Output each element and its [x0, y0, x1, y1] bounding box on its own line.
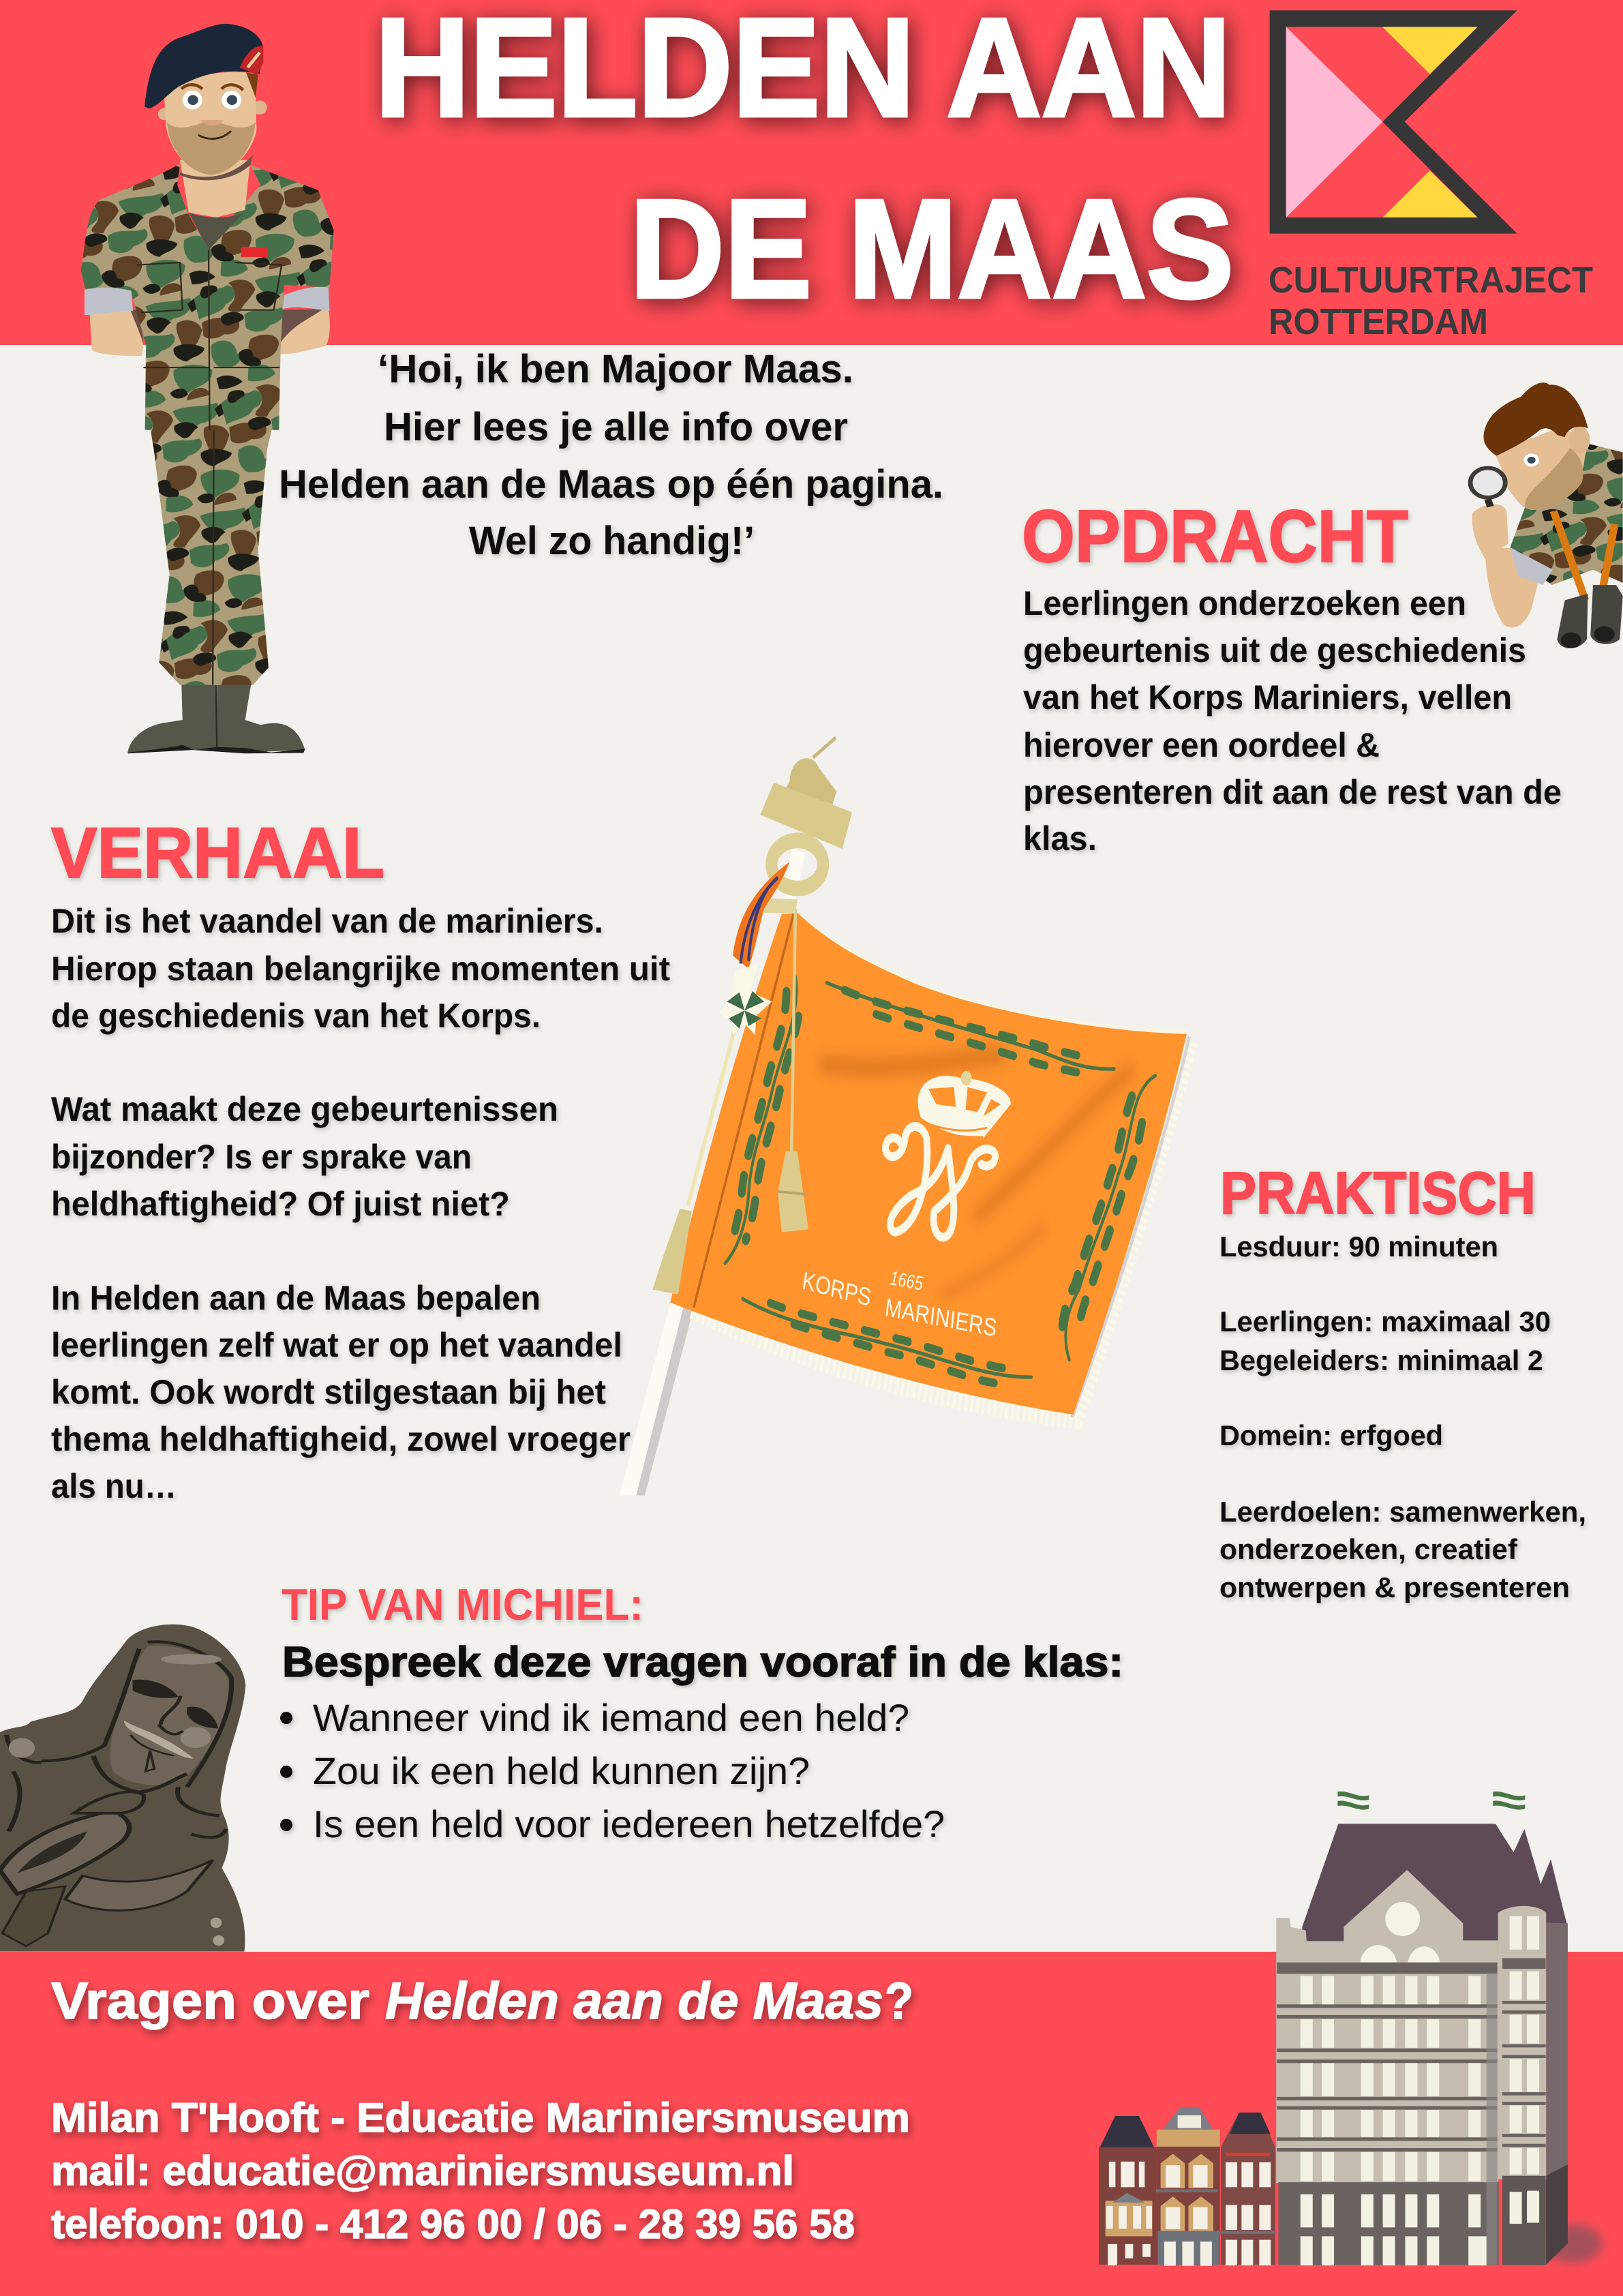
- boots: [127, 682, 305, 753]
- text: Verhaal body: Hierop staan belangrijke momenten uit: [51, 950, 670, 988]
- heading: Verhaal: VERHAAL: [51, 813, 384, 893]
- title: [375, 0, 1234, 327]
- neck: [180, 160, 250, 217]
- horizontal bands: [1277, 1958, 1546, 2151]
- text: Opdracht body: klas.: [1023, 819, 1097, 858]
- trousers: [150, 427, 272, 685]
- quote from Majoor Maas: ‘Hoi, ik ben Majoor Maas.: [378, 347, 853, 391]
- flag inscription: KORPS: [800, 1267, 873, 1312]
- name badge: [241, 247, 268, 257]
- heading: Tip van Michiel: TIP VAN MICHIEL:: [282, 1580, 643, 1629]
- tower: [1498, 1906, 1546, 2179]
- jacket seam: [209, 250, 214, 685]
- forearms and hands: [90, 309, 330, 356]
- text: Bespreek deze vragen: Bespreek deze vragen vooraf in de klas:: [282, 1639, 1123, 1686]
- ribbon: [733, 862, 789, 969]
- tower lower level: [1502, 2176, 1546, 2265]
- cravat knot: [74, 1792, 144, 1813]
- text: Verhaal body: Dit is het vaandel van de mariniers.: [51, 902, 603, 940]
- text: Verhaal body: thema heldhaftigheid, zowel vroeger: [51, 1420, 631, 1458]
- arm: [1485, 548, 1539, 627]
- hand: [2, 1886, 65, 1946]
- row of small houses: [1099, 2108, 1276, 2266]
- question 1: Wanneer vind ik iemand een held?: [313, 1696, 909, 1739]
- text: Verhaal body: de geschiedenis van het Korps.: [51, 997, 541, 1035]
- footer: contact details: Milan T'Hooft - Educatie Mariniersmuseum: [51, 2095, 910, 2141]
- royal crown: [918, 1071, 1011, 1138]
- flag folds: [825, 1055, 1130, 1295]
- cheek highlights: [9, 1654, 222, 1758]
- text: Praktisch details: ontwerpen & presenteren: [1219, 1571, 1570, 1603]
- buttons: [211, 1918, 224, 1946]
- text: Opdracht body: presenteren dit aan de rest van de: [1023, 773, 1562, 811]
- ear: [1569, 426, 1590, 454]
- wreath: top: [827, 983, 1114, 1074]
- flagpole: [620, 849, 805, 1496]
- cravat: [0, 1811, 130, 1894]
- list: discussion questions: [280, 1696, 945, 1845]
- statue body: [0, 1625, 245, 1952]
- text: Opdracht body: hierover een oordeel &: [1023, 726, 1380, 764]
- question 3: Is een held voor iedereen hetzelfde?: [313, 1802, 945, 1845]
- corner shadow: [1487, 1973, 1498, 2265]
- logo text: ROTTERDAM: [1269, 301, 1488, 342]
- moustache: [124, 1721, 194, 1758]
- ribbon stripes: [741, 877, 778, 963]
- footer: contact details: [51, 2095, 910, 2247]
- footer: contact question: Vragen over: [51, 1972, 369, 2030]
- flag cloth: [670, 913, 1187, 1415]
- binoculars: [1557, 585, 1623, 648]
- text: Verhaal body: heldhaftigheid? Of juist niet?: [51, 1185, 510, 1223]
- eyes: [133, 1680, 218, 1728]
- footer: contact question: Helden aan de Maas: [385, 1972, 883, 2030]
- hand: [1472, 504, 1508, 559]
- magnifying glass: [1470, 468, 1505, 507]
- head skin: [1494, 428, 1588, 510]
- text: Opdracht body: Leerlingen onderzoeken een: [1023, 584, 1466, 622]
- text: Opdracht body: [1023, 584, 1562, 858]
- text: Opdracht body: gebeurtenis uit de geschiedenis: [1023, 631, 1526, 669]
- logo text: CULTUURTRAJECT: [1269, 260, 1593, 301]
- illustration: statue of Michiel de Ruyter: [0, 1625, 245, 1952]
- text: Praktisch details: Domein: erfgoed: [1219, 1419, 1443, 1451]
- medal cross: [718, 963, 772, 1035]
- footer: contact details: mail: educatie@mariniersmuseum.nl: [51, 2148, 794, 2194]
- text: Verhaal body: bijzonder? Is er sprake van: [51, 1138, 472, 1176]
- flag fringe: [692, 913, 1193, 1420]
- quote from Majoor Maas: Helden aan de Maas op één pagina.: [279, 462, 943, 507]
- flag inscription: MARINIERS: [883, 1293, 998, 1342]
- t-shirt collar: [189, 213, 243, 250]
- beard: [1525, 448, 1583, 509]
- finial: [760, 738, 852, 913]
- text: Praktisch details: Leerlingen: maximaal 30: [1219, 1305, 1551, 1338]
- beret: [145, 24, 263, 108]
- flag hem: [694, 914, 793, 1308]
- head: [158, 72, 267, 180]
- arched windows: [1360, 1945, 1440, 1963]
- illustration: Witte Huis building and houses: [1099, 1792, 1602, 2266]
- rolled sleeves: [85, 287, 329, 315]
- panel: red header band: [0, 0, 1623, 345]
- text: Verhaal body: Wat maakt deze gebeurtenissen: [51, 1090, 558, 1128]
- hair outline: [7, 1642, 232, 1837]
- rolled sleeve: [1510, 547, 1553, 585]
- flag inscription: [800, 1267, 998, 1342]
- cravat shadow: [18, 1832, 87, 1873]
- pocket lines: [136, 262, 282, 367]
- text: Verhaal body: In Helden aan de Maas bepalen: [51, 1279, 541, 1317]
- house 2: [1156, 2108, 1220, 2266]
- camouflage jacket: [81, 164, 334, 430]
- house 3: [1219, 2113, 1276, 2265]
- footer: contact details: telefoon: 010 - 412 96 00 / 06 - 28 39 56 58: [51, 2201, 855, 2247]
- logo mark: [1270, 10, 1517, 234]
- lace collar: [65, 1860, 213, 1910]
- title: DE MAAS: [630, 170, 1234, 327]
- tower base side: [1546, 2164, 1568, 2265]
- roof flags: [1337, 1792, 1525, 1824]
- quote from Majoor Maas: [279, 347, 943, 563]
- golden cord and tassel: [778, 909, 808, 1232]
- wreath: right: [1061, 1076, 1155, 1360]
- logo text: [1269, 260, 1593, 342]
- quote from Majoor Maas: Hier lees je alle info over: [384, 405, 848, 449]
- text: Praktisch details: Begeleiders: minimaal 2: [1219, 1344, 1543, 1376]
- wreath: bottom: [742, 1299, 1031, 1384]
- nose: [159, 1696, 183, 1734]
- text: Verhaal body: leerlingen zelf wat er op het vaandel: [51, 1326, 622, 1364]
- text: Verhaal body: komt. Ook wordt stilgestaan bij het: [51, 1373, 606, 1411]
- tower side wall: [1546, 1922, 1568, 2176]
- facade: [1276, 1870, 1498, 2183]
- royal monogram: [885, 1126, 995, 1237]
- heading: Opdracht: OPDRACHT: [1022, 495, 1408, 578]
- illustration: soldier Majoor Maas: [81, 24, 334, 753]
- ground shadow: [1545, 2224, 1602, 2263]
- text: Praktisch details: Leerdoelen: samenwerken,: [1219, 1496, 1586, 1528]
- mouth and goatee: [130, 1735, 174, 1772]
- text: Praktisch details: Lesduur: 90 minuten: [1219, 1230, 1498, 1263]
- text: Verhaal body: [51, 902, 670, 1505]
- eye: [1523, 453, 1539, 467]
- footer: contact question: ?: [885, 1972, 913, 2030]
- text: Verhaal body: als nu…: [51, 1467, 177, 1505]
- lower level: [1278, 2182, 1499, 2265]
- face: [110, 1646, 228, 1785]
- flag inscription: 1665: [889, 1267, 924, 1295]
- roof: [1302, 1824, 1566, 1952]
- text: Opdracht body: van het Korps Mariniers, vellen: [1023, 678, 1512, 716]
- round window: [1385, 1902, 1420, 1936]
- question 2: Zou ik een held kunnen zijn?: [313, 1749, 810, 1792]
- heading: Praktisch: PRAKTISCH: [1220, 1160, 1536, 1226]
- house 1: [1099, 2116, 1157, 2265]
- facade windows: [1301, 1916, 1539, 2265]
- camouflage shirt: [1508, 444, 1623, 585]
- illustration: flag of the Korps Mariniers: [620, 738, 1193, 1496]
- neck band: [93, 1756, 187, 1792]
- golden tassel on pole: [652, 1209, 692, 1295]
- wreath: left: [725, 976, 800, 1263]
- hair: [1484, 382, 1588, 456]
- iris: [1528, 457, 1536, 464]
- logo: Cultuurtraject Rotterdam: [1269, 10, 1593, 342]
- panel: red footer band: [0, 1952, 1623, 2296]
- text: Praktisch details: onderzoeken, creatief: [1219, 1533, 1518, 1565]
- text: Praktisch details: [1219, 1230, 1586, 1603]
- orange straps: [1553, 511, 1615, 600]
- quote from Majoor Maas: Wel zo handig!’: [469, 519, 755, 563]
- footer: contact question: [51, 1972, 913, 2030]
- illustration: Majoor Maas with magnifying glass and binoculars: [1470, 382, 1623, 648]
